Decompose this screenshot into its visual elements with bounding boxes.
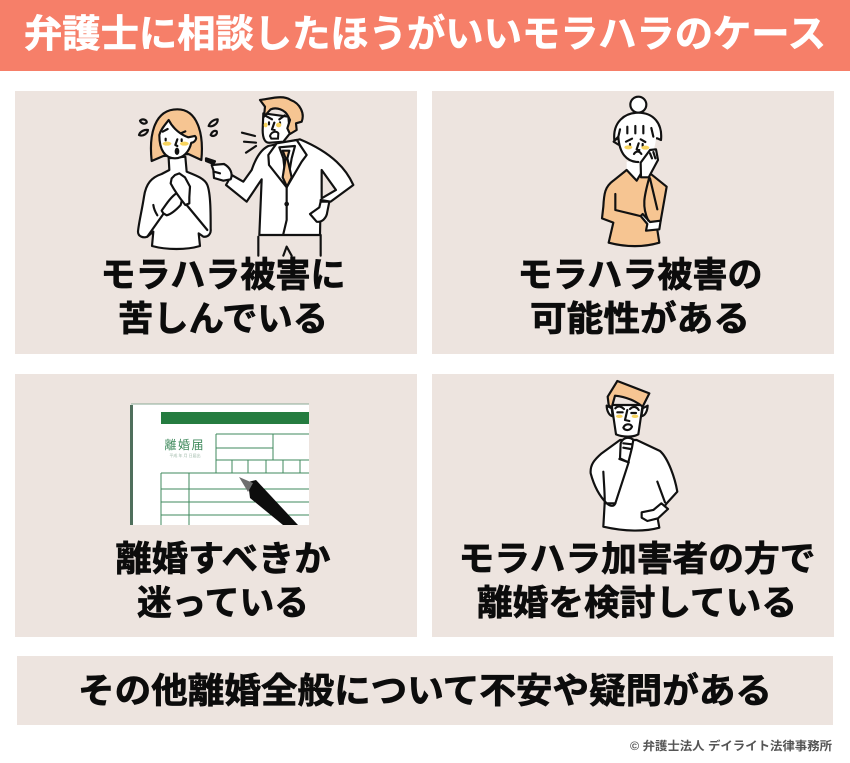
- icon: pen: [239, 477, 298, 525]
- illustration: divorce form and pen: 離婚届: [164, 438, 204, 452]
- panel: unsure about divorce: [15, 374, 417, 637]
- illustration: divorce form and pen: 平成 年 月 日届出: [169, 452, 201, 458]
- caption: unsure: [116, 540, 330, 623]
- caption: unsure: 迷っている: [137, 584, 309, 623]
- copyright: © 弁護士法人 デイライト法律事務所: [630, 738, 832, 753]
- caption: suffering: モラハラ被害に: [100, 256, 346, 295]
- illustration: worried woman: [602, 97, 667, 246]
- illustration: divorce form and pen: [130, 404, 309, 525]
- caption: perpetrator: モラハラ加害者の方で: [458, 540, 816, 579]
- caption: possibility: [518, 256, 762, 339]
- caption: perpetrator: 離婚を検討している: [477, 584, 797, 623]
- title banner: [0, 0, 850, 71]
- panel: other concerns: [17, 656, 833, 725]
- panel: other concerns: その他離婚全般について不安や疑問がある: [78, 672, 772, 711]
- caption: perpetrator: [458, 540, 816, 623]
- caption: suffering: 苦しんでいる: [118, 300, 328, 339]
- caption: suffering: [100, 256, 346, 339]
- panel: perpetrator considering divorce: [432, 374, 834, 637]
- caption: possibility: 可能性がある: [530, 300, 750, 339]
- illustration: man accusing woman: [138, 97, 353, 256]
- panel: possibility of harassment: [432, 91, 834, 354]
- caption: unsure: 離婚すべきか: [116, 540, 330, 579]
- caption: possibility: モラハラ被害の: [518, 256, 762, 295]
- panel: suffering from moral harassment: [15, 91, 417, 354]
- illustration: thinking man: [591, 381, 677, 531]
- title banner: 弁護士に相談したほうがいいモラハラのケース: [24, 14, 826, 56]
